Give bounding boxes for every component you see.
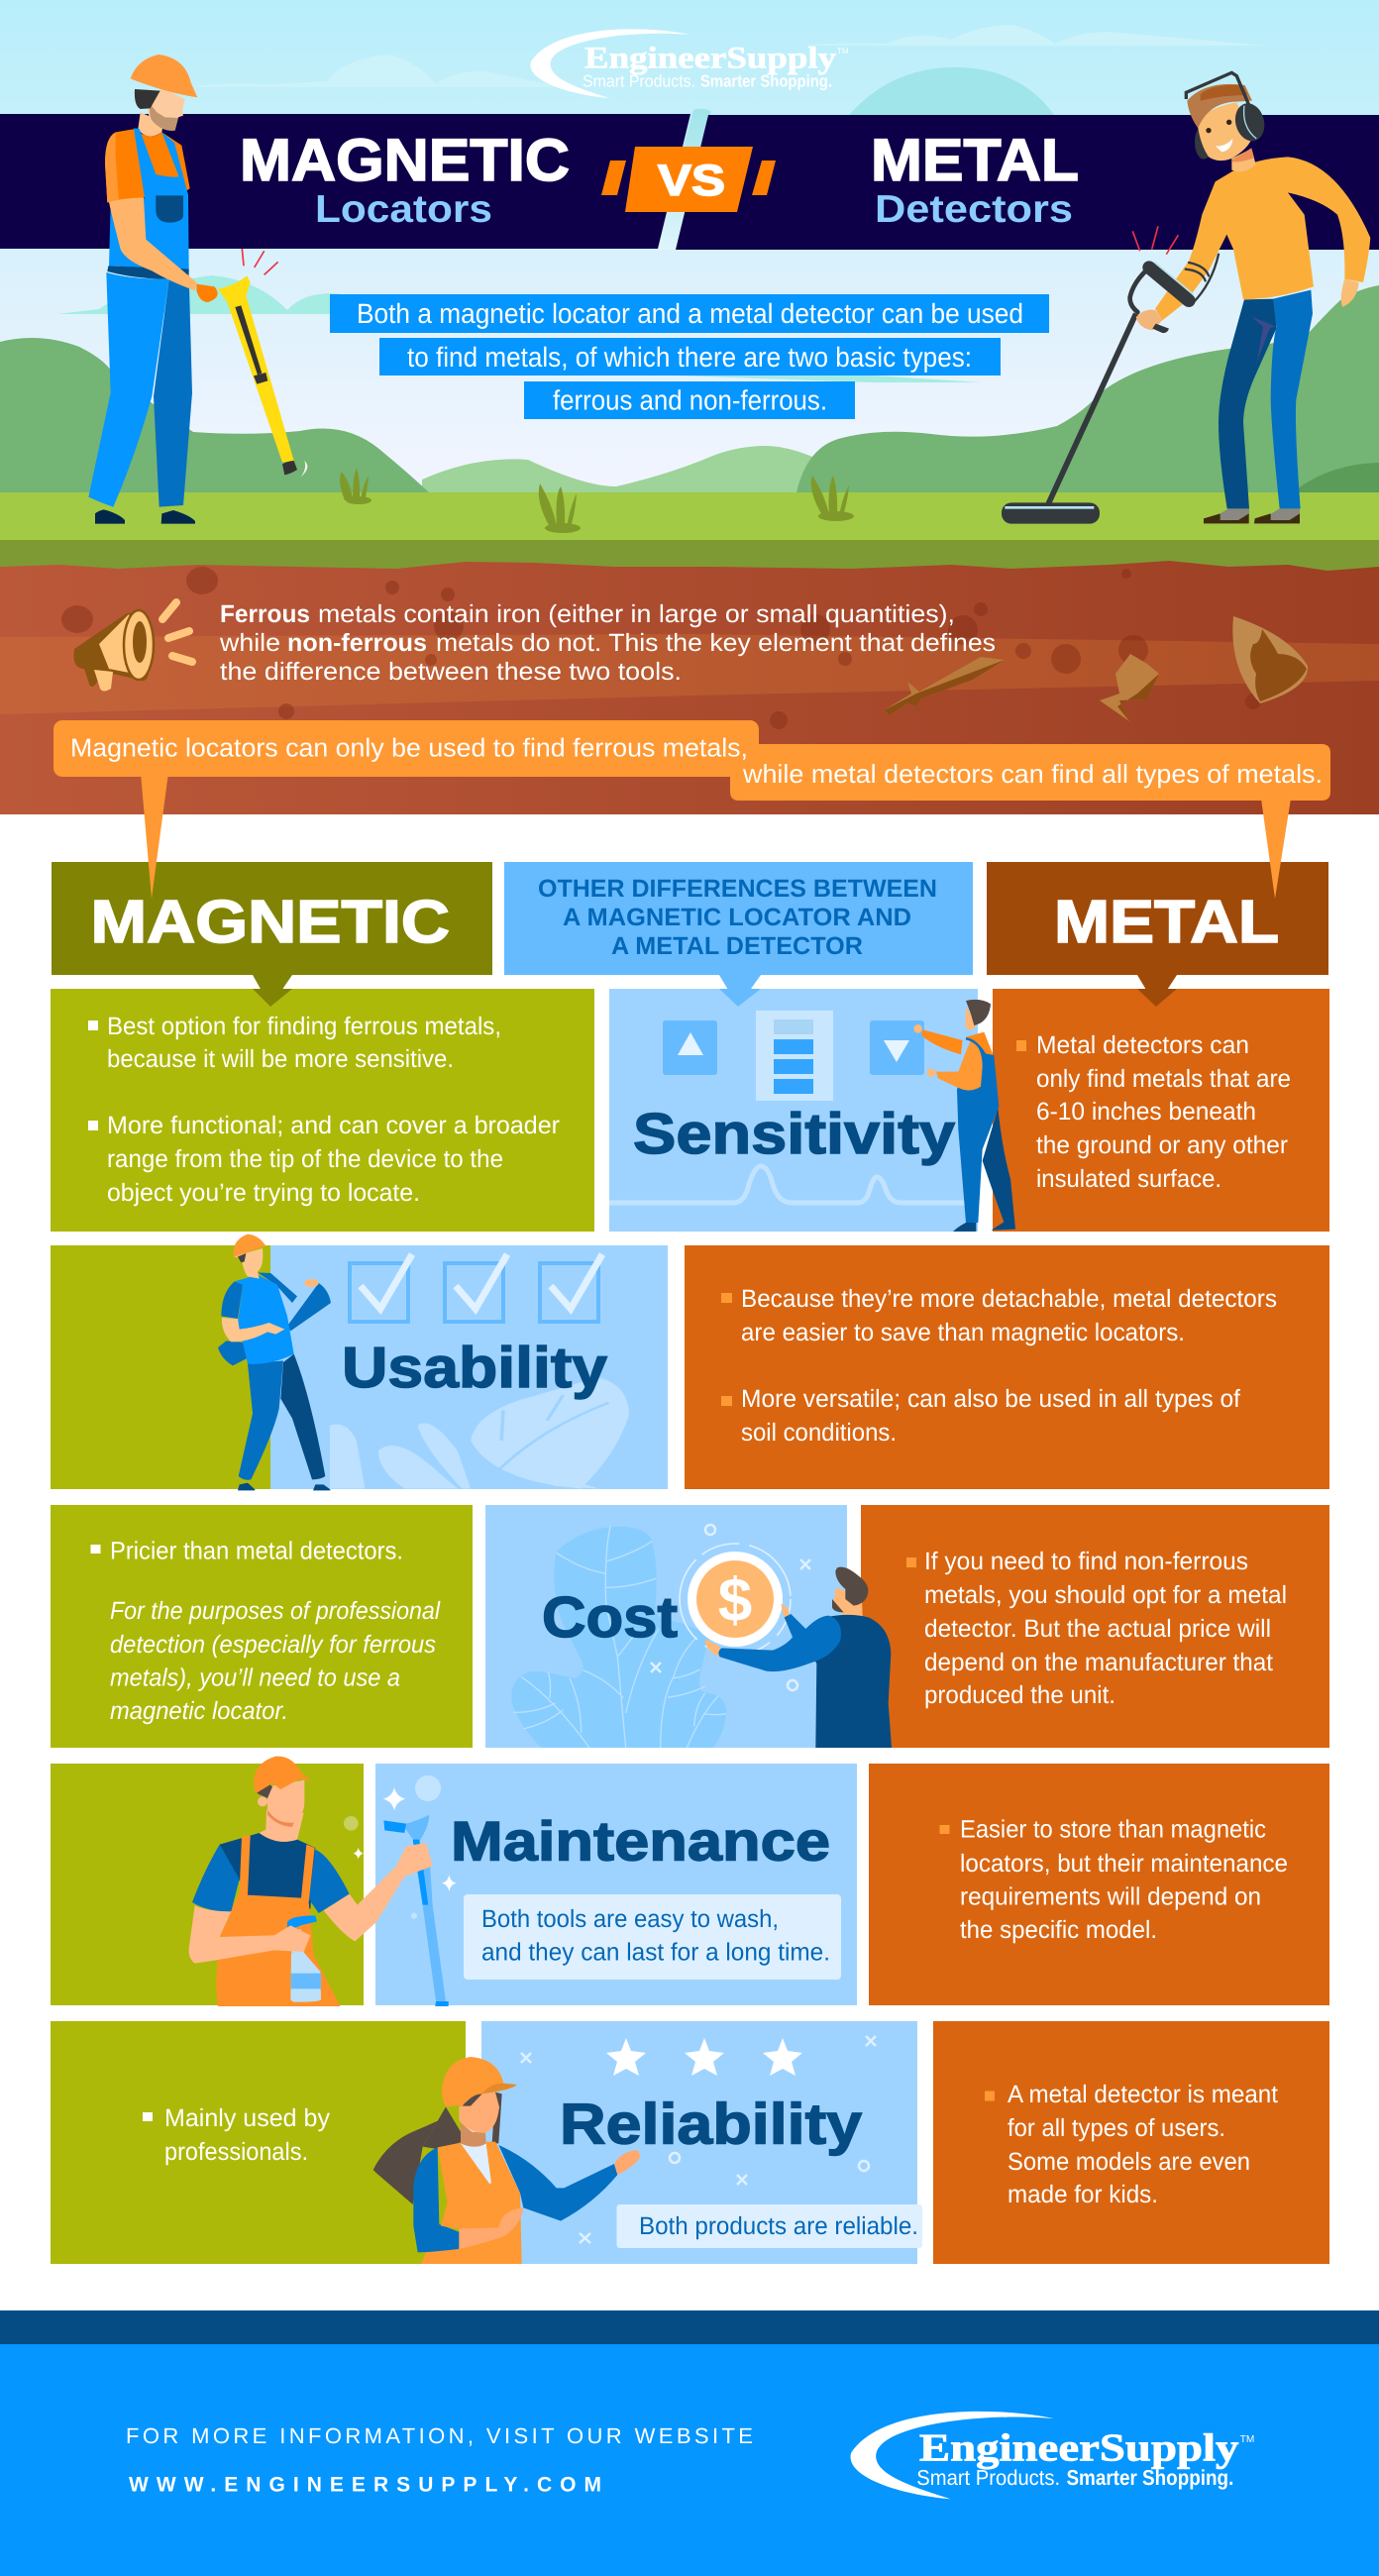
heading: maintenance: Maintenance (451, 1809, 830, 1873)
logo: top: TM (837, 47, 849, 55)
title: metal detectors (871, 127, 1079, 231)
heading: cost: Cost (542, 1585, 678, 1650)
panel: reliability magnetic (51, 2021, 466, 2264)
coin (680, 1544, 791, 1655)
callout: magnetic locators (53, 720, 759, 899)
figure: worker with mop and spray (189, 1757, 457, 2006)
grass ground (0, 492, 1379, 542)
figure: worker with tube (218, 1234, 331, 1490)
sparkles and bubbles (344, 1775, 457, 1919)
title: metal detectors: Detectors (875, 188, 1073, 231)
intro paragraph boxes: ferrous and non-ferrous. (553, 384, 827, 416)
logo: top: EngineerSupply (584, 40, 837, 75)
logo: footer: TM (1240, 2433, 1255, 2445)
hero scene background (0, 0, 1379, 542)
note box: Both products are reliable. (639, 2212, 918, 2240)
panel: other differences header (504, 862, 973, 1007)
teal cloud left (57, 275, 347, 314)
panel: cost metal: depend on the manufacturer that (924, 1649, 1273, 1676)
note box (464, 1894, 841, 1980)
callout: metal detectors: while metal detectors can find all types of metals. (742, 759, 1323, 789)
up button (663, 1020, 717, 1075)
glove (196, 284, 218, 302)
headphones (1186, 72, 1250, 107)
cap (254, 1757, 312, 1793)
detector shaft (1048, 314, 1136, 503)
stars (606, 2038, 802, 2076)
figure: man holding coin (705, 1567, 892, 1748)
panel: other differences header: OTHER DIFFERENCES BETWEEN (538, 875, 937, 903)
figure: man with magnetic locator (88, 54, 307, 524)
level meter (756, 1011, 833, 1101)
panel: usability metal (685, 1245, 1329, 1489)
neck (138, 112, 163, 137)
title: metal detectors: METAL (871, 127, 1079, 193)
hair (135, 89, 160, 109)
panel: cost magnetic: detection (especially for ferrous (110, 1631, 436, 1659)
heading: reliability: Reliability (560, 2093, 862, 2156)
panel: cost (485, 1505, 847, 1748)
distant mountain (849, 67, 1054, 115)
face (1197, 102, 1251, 161)
panel: usability metal: soil conditions. (741, 1419, 897, 1447)
intro text on soil: metals contain iron (either in large or small quantities), (318, 600, 955, 628)
right arm (324, 1843, 433, 1941)
grass tuft 1 (340, 469, 371, 504)
sweater (1155, 157, 1370, 320)
logo: footer: EngineerSupply (919, 2425, 1239, 2470)
footer call to action: FOR MORE INFORMATION, VISIT OUR WEBSITE (126, 2423, 753, 2448)
footer (0, 2344, 1379, 2576)
band left (0, 114, 690, 249)
panel: maintenance magnetic (51, 1764, 364, 2005)
signal ticks (1132, 226, 1178, 255)
band gap (656, 109, 711, 250)
footer strip (0, 2310, 1379, 2344)
hill: light centre (422, 446, 852, 492)
figure: woman in hard hat (373, 2057, 640, 2264)
panel: maintenance metal (869, 1764, 1329, 2005)
panel: sensitivity magnetic: More functional; and can cover a broader (107, 1112, 560, 1139)
arm (109, 197, 196, 290)
heading: usability: Usability (342, 1336, 607, 1400)
soil section (0, 540, 1379, 814)
shirt (220, 1833, 315, 1909)
panel: cost metal: detector. But the actual price will (924, 1615, 1271, 1643)
vs badge: VS (658, 157, 725, 205)
panel: magnetic header: MAGNETIC (91, 888, 450, 955)
left arm (189, 1905, 310, 1964)
intro paragraph boxes: to find metals, of which there are two basic types: (407, 342, 972, 373)
panel: reliability (481, 2021, 922, 2264)
hair (1187, 84, 1252, 128)
logo: footer: Smarter Shopping. (1066, 2466, 1233, 2490)
grass tuft 3 (811, 476, 854, 521)
logo: footer (851, 2412, 1255, 2499)
panel: maintenance metal: Easier to store than magnetic (960, 1815, 1266, 1843)
panel: sensitivity magnetic: Best option for finding ferrous metals, (107, 1013, 501, 1040)
hill: left (0, 338, 429, 492)
hill: dark right (1298, 463, 1379, 492)
neck and face (260, 1810, 304, 1842)
panel: usability metal: are easier to save than magnetic locators. (741, 1319, 1185, 1346)
panel: sensitivity magnetic: because it will be more sensitive. (107, 1045, 454, 1073)
free hand (1341, 279, 1359, 307)
panel: cost magnetic (51, 1505, 473, 1748)
locator tool (218, 249, 307, 478)
hand (1136, 309, 1162, 330)
callout: metal detectors (730, 744, 1330, 899)
panel: metal header (987, 862, 1328, 1007)
panel: maintenance metal: the specific model. (960, 1916, 1157, 1944)
logo: footer: Smart Products. (916, 2466, 1060, 2490)
panel: reliability metal (933, 2021, 1329, 2264)
note box: Both tools are easy to wash, (481, 1905, 779, 1933)
cloud: top left (193, 54, 565, 87)
leaf decoration (330, 1377, 629, 1488)
header band (0, 109, 1379, 250)
panel: sensitivity metal: Metal detectors can (1036, 1031, 1249, 1059)
coin: $ (718, 1566, 752, 1635)
panel: metal header: METAL (1054, 888, 1279, 955)
spray bottle (287, 1915, 321, 2002)
title: magnetic locators: Locators (315, 188, 492, 231)
heading: sensitivity: Sensitivity (633, 1102, 955, 1166)
panel: cost metal: metals, you should opt for a metal (924, 1581, 1287, 1609)
soil pebbles (61, 567, 1261, 729)
intro text on soil: metals do not. This the key element that defines (436, 629, 996, 657)
hill: right (796, 285, 1379, 492)
panel: usability metal: More versatile; can also be used in all types of (741, 1385, 1240, 1413)
panel: cost magnetic: Pricier than metal detectors. (110, 1538, 403, 1565)
logo: top (530, 29, 849, 98)
intro text on soil (219, 600, 996, 686)
jeans front leg (1271, 290, 1313, 508)
panel: reliability magnetic: Mainly used by (164, 2104, 330, 2132)
jeans back leg (1219, 299, 1276, 508)
head (148, 89, 185, 131)
panel: other differences header: A MAGNETIC LOCATOR AND (563, 904, 911, 931)
title: magnetic locators (240, 127, 570, 231)
detector coil (1002, 502, 1100, 524)
panel: sensitivity metal: insulated surface. (1036, 1165, 1221, 1193)
panel: other differences header: A METAL DETECTOR (611, 932, 863, 960)
logo: top: Smarter Shopping. (700, 71, 832, 91)
panel: cost metal (861, 1505, 1329, 1748)
panel: sensitivity (609, 989, 978, 1232)
panel: maintenance metal: locators, but their maintenance (960, 1850, 1288, 1878)
panel: reliability metal: Some models are even (1008, 2148, 1250, 2176)
intro text on soil: non-ferrous (287, 629, 427, 657)
neck (1231, 149, 1256, 171)
cloud: top right (800, 25, 1267, 46)
panel: maintenance (375, 1764, 857, 2005)
note box: and they can last for a long time. (481, 1938, 830, 1966)
figure: worker at panel (913, 1000, 1015, 1232)
callout: magnetic locators: Magnetic locators can only be used to find ferrous metals, (70, 733, 748, 763)
apron (216, 1836, 340, 2006)
trouser left leg (88, 272, 169, 507)
intro text on soil: while (219, 629, 280, 657)
intro paragraph boxes (330, 294, 1049, 419)
soil lighter stripe (0, 634, 1379, 714)
trouser right leg (154, 274, 192, 507)
icon: megaphone (73, 602, 192, 692)
figure: man with metal detector (1002, 72, 1370, 524)
checkboxes (350, 1254, 602, 1322)
intro paragraph boxes: Both a magnetic locator and a metal detector can be used (357, 298, 1023, 329)
vs badge (601, 147, 776, 212)
pocket (156, 195, 183, 223)
hard hat (131, 54, 197, 97)
mop (383, 1815, 449, 2006)
icon: buried artifact (1100, 654, 1159, 721)
grass tuft 2 (539, 483, 581, 533)
panel: sensitivity metal: the ground or any other (1036, 1131, 1288, 1159)
panel: usability metal: Because they’re more detachable, metal detectors (741, 1285, 1277, 1313)
band right (676, 115, 1379, 250)
shirt (105, 129, 190, 202)
decoration marks (651, 1525, 810, 1690)
pulse line (609, 1166, 968, 1203)
decoration marks (521, 2036, 876, 2243)
belt (107, 266, 189, 279)
panel: cost magnetic: magnetic locator. (110, 1697, 288, 1725)
title: magnetic locators: MAGNETIC (240, 127, 570, 193)
panel: reliability magnetic: professionals. (164, 2138, 308, 2166)
icon: buried fossil (1232, 616, 1308, 703)
panel: usability (51, 1245, 668, 1489)
panel: cost metal: produced the unit. (924, 1681, 1115, 1709)
down button (870, 1020, 924, 1075)
panel: sensitivity magnetic: object you’re trying to locate. (107, 1179, 420, 1207)
shoes (1204, 508, 1300, 523)
footer url: WWW.ENGINEERSUPPLY.COM (129, 2473, 601, 2497)
teal cloud centre (674, 376, 981, 382)
panel: sensitivity metal (993, 989, 1329, 1232)
overalls bib (109, 128, 189, 270)
intro text on soil: the difference between these two tools. (220, 658, 682, 686)
panel: sensitivity metal: 6-10 inches beneath (1036, 1098, 1256, 1126)
panel: magnetic header (52, 862, 492, 1007)
plant decoration (511, 1527, 726, 1748)
panel: cost magnetic: metals), you’ll need to use a (110, 1664, 400, 1692)
panel: reliability metal: A metal detector is meant (1008, 2081, 1278, 2108)
detector handle (1130, 255, 1219, 312)
intro text on soil: Ferrous (220, 600, 310, 628)
panel: reliability metal: for all types of users. (1008, 2114, 1225, 2142)
rear ear cup (1195, 125, 1213, 160)
panel: sensitivity metal: only find metals that are (1036, 1065, 1291, 1093)
panel: sensitivity magnetic (51, 989, 594, 1232)
note box (616, 2204, 922, 2248)
topsoil edge (0, 540, 1379, 571)
panel: maintenance metal: requirements will depend on (960, 1882, 1261, 1910)
logo: top: Smart Products. (583, 71, 695, 91)
panel: sensitivity magnetic: range from the tip of the device to the (107, 1145, 503, 1173)
panel: cost metal: If you need to find non-ferrous (924, 1548, 1248, 1575)
panel: cost magnetic: For the purposes of professional (110, 1597, 441, 1625)
shoes (95, 509, 195, 524)
panel: reliability metal: made for kids. (1008, 2181, 1158, 2208)
icon: buried sword (884, 657, 1005, 715)
